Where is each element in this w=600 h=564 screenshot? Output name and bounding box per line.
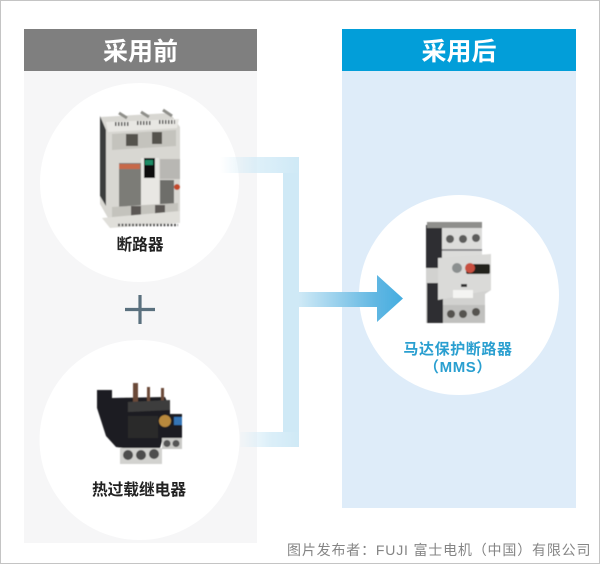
header bar: before [24,29,257,71]
icon: thermal overload relay [97,383,182,464]
circle: breaker backdrop [40,83,239,282]
icon: motor protection circuit breaker [426,222,491,323]
connector: bottom branch [240,432,299,447]
circle: MMS backdrop [359,195,559,395]
icon: circuit breaker [100,110,180,228]
icon: plus sign [125,295,155,324]
arrow: to MMS [299,275,403,322]
connector: top branch [220,157,299,173]
heading: after: 采用后 [421,38,496,66]
label: breaker: 断路器 [116,237,164,254]
panel: after background [342,71,576,508]
circle: relay backdrop [40,340,240,540]
label: MMS [403,341,513,376]
panel: before background [24,71,257,543]
label: relay: 热过载继电器 [92,482,186,499]
footer credit: 图片发布者：FUJI 富士电机（中国）有限公司 [287,542,591,558]
label: MMS: （MMS） [424,359,492,376]
header bar: after [342,29,576,71]
connector: vertical bar [283,173,299,432]
label: MMS: 马达保护断路器 [403,341,513,358]
heading: before: 采用前 [103,38,178,66]
